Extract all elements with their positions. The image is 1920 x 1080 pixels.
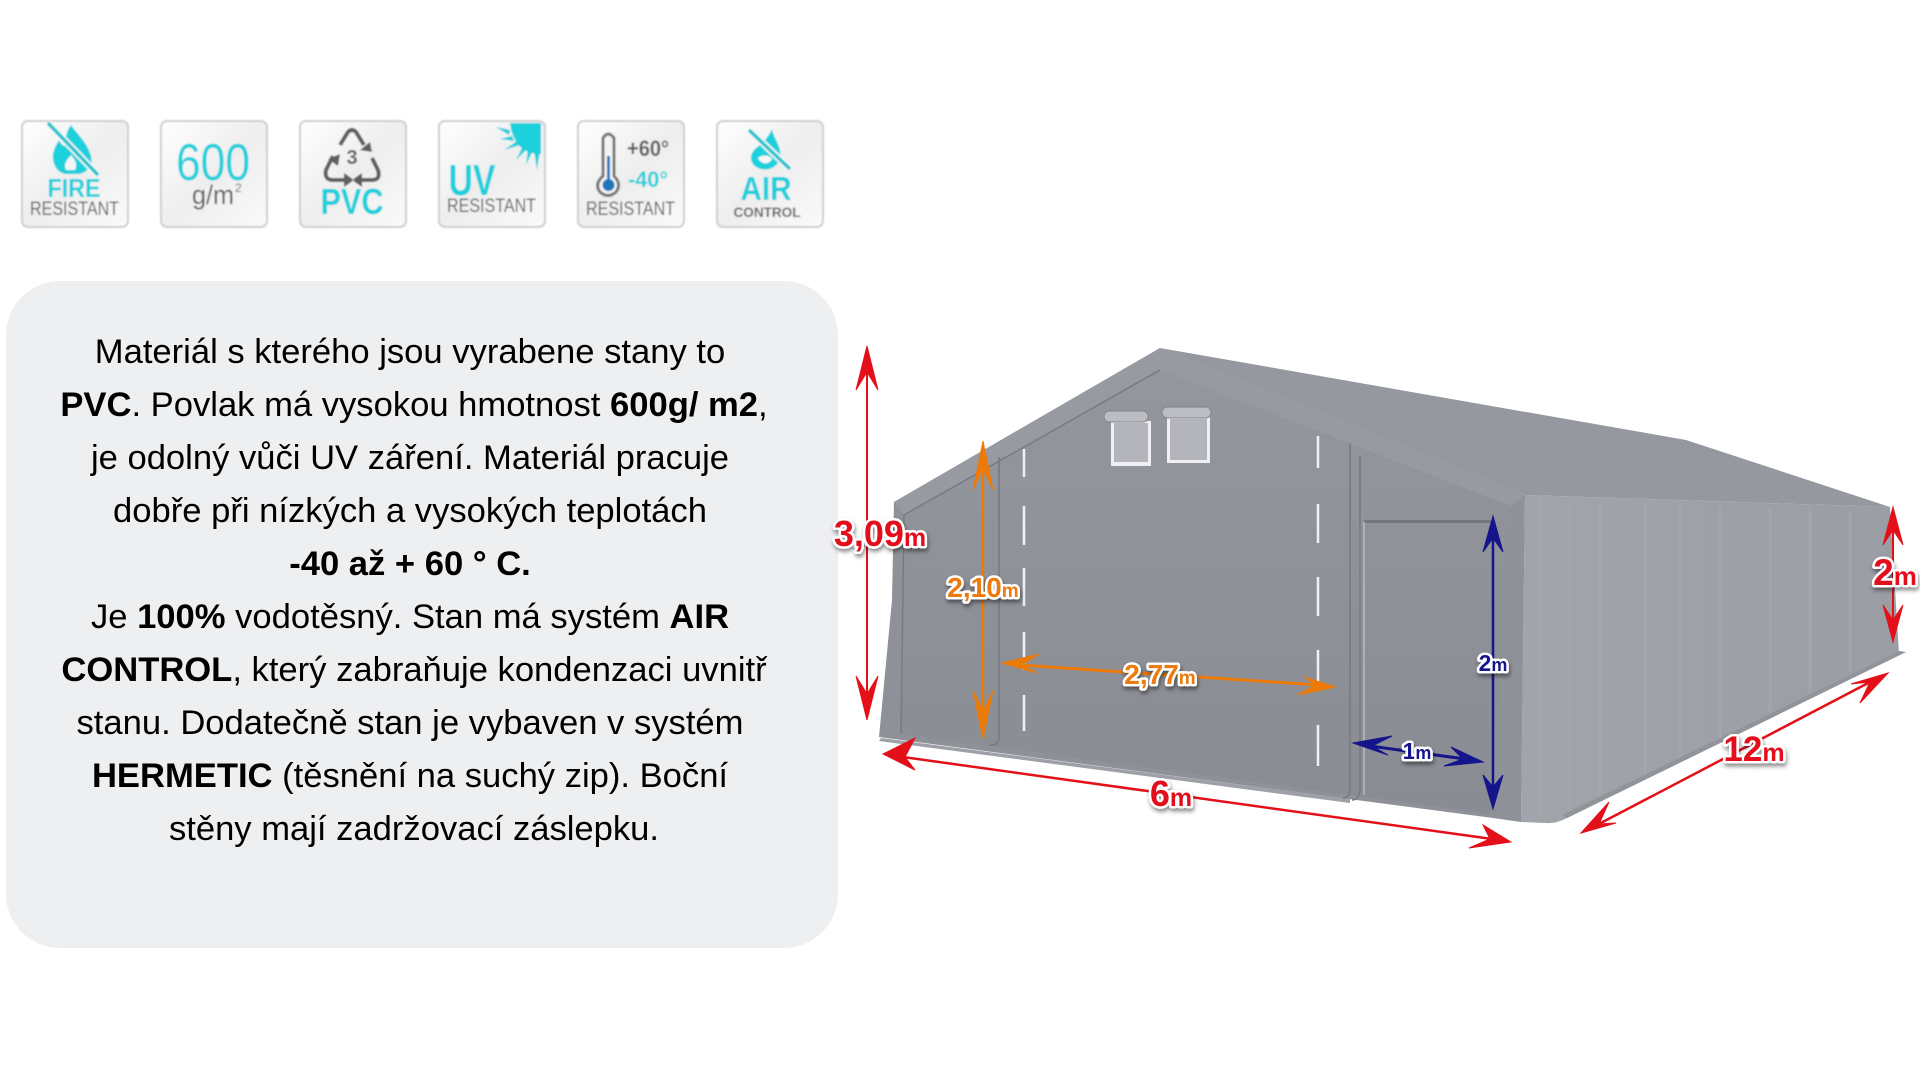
icon: air control (717, 121, 823, 227)
tent roof (1160, 348, 1890, 507)
icon: 600 g/m2: g/m (192, 180, 234, 210)
text block: material description: dobře při nízkých a vysokých teplotách (113, 492, 707, 530)
label: 2m door: 2m (1479, 650, 1507, 676)
arrow: 3,09m height (856, 346, 878, 720)
tent side wall (1521, 495, 1906, 823)
arrow: 12m tent length (1581, 673, 1888, 833)
icon: UV resistant (439, 121, 545, 227)
text block: material description: CONTROL, který zabraňuje kondenzaci uvnitř (61, 651, 767, 689)
icon: fire resistant: RESISTANT (30, 199, 119, 220)
icon: recycling PVC: PVC (320, 181, 384, 222)
label: 12m: 12m (1723, 730, 1785, 769)
text block: material description: je odolný vůči UV záření. Materiál pracuje (91, 439, 729, 477)
arrow: 1m side door width (1353, 736, 1483, 766)
icon: 600 g/m2 (161, 121, 267, 227)
tent illustration (879, 348, 1906, 823)
text block: material description: HERMETIC (těsnění na suchý zip). Boční (92, 757, 728, 795)
icon: UV resistant: UV (448, 156, 496, 205)
arrow: 2m side door height (1483, 516, 1503, 809)
label: 2,10m: 2,10m (947, 572, 1019, 603)
text block: material description: Materiál s kterého jsou vyrabene stany to (95, 333, 725, 371)
icon row (22, 121, 823, 227)
icon: recycling PVC: 3 (346, 147, 358, 169)
arrow: 2,77m door width (1002, 654, 1336, 695)
label: 3,09m: 3,09m (834, 513, 926, 554)
label: 6m: 6m (1150, 773, 1192, 814)
icon: fire resistant: FIRE (48, 173, 100, 203)
icon: recycling PVC (300, 121, 406, 227)
icon: 600 g/m2: 2 (235, 181, 242, 195)
icon: air control: CONTROL (734, 204, 801, 220)
text block: material description: Je 100% vodotěsný. Stan má systém AIR (91, 598, 729, 636)
icon: air control: AIR (740, 170, 792, 207)
label: 1m door: 1m (1403, 738, 1431, 764)
arrow: 2,10m door height (973, 441, 993, 739)
text block: material description: stanu. Dodatečně stan je vybaven v systém (77, 704, 743, 742)
panel: material description (6, 281, 838, 948)
tent door panel and seams (990, 457, 999, 745)
icon: fire resistant (22, 121, 128, 227)
label: 2m wall: 2m (1873, 552, 1917, 593)
text block: material description: stěny mají zadržovací záslepku. (169, 810, 659, 848)
tent white zip dashes (1024, 436, 1318, 766)
text block: material description: -40 až + 60 ° C. (289, 545, 531, 583)
icon: temperature resistant: -40° (628, 167, 668, 192)
tent front gable (879, 348, 1525, 822)
icon: temperature resistant (578, 121, 684, 227)
label: 2,77m: 2,77m (1124, 659, 1196, 690)
tent windows (1104, 407, 1211, 466)
icon: temperature resistant: +60° (627, 136, 669, 161)
icon: UV resistant: RESISTANT (447, 196, 536, 217)
arrow: 6m tent width (883, 738, 1511, 848)
arrow: 2m side wall height (1883, 507, 1903, 642)
icon: temperature resistant: RESISTANT (586, 199, 675, 220)
text block: material description: PVC. Povlak má vysokou hmotnost 600g/ m2, (60, 386, 768, 424)
text block: material description (60, 333, 768, 848)
icon: 600 g/m2: 600 (176, 134, 250, 192)
